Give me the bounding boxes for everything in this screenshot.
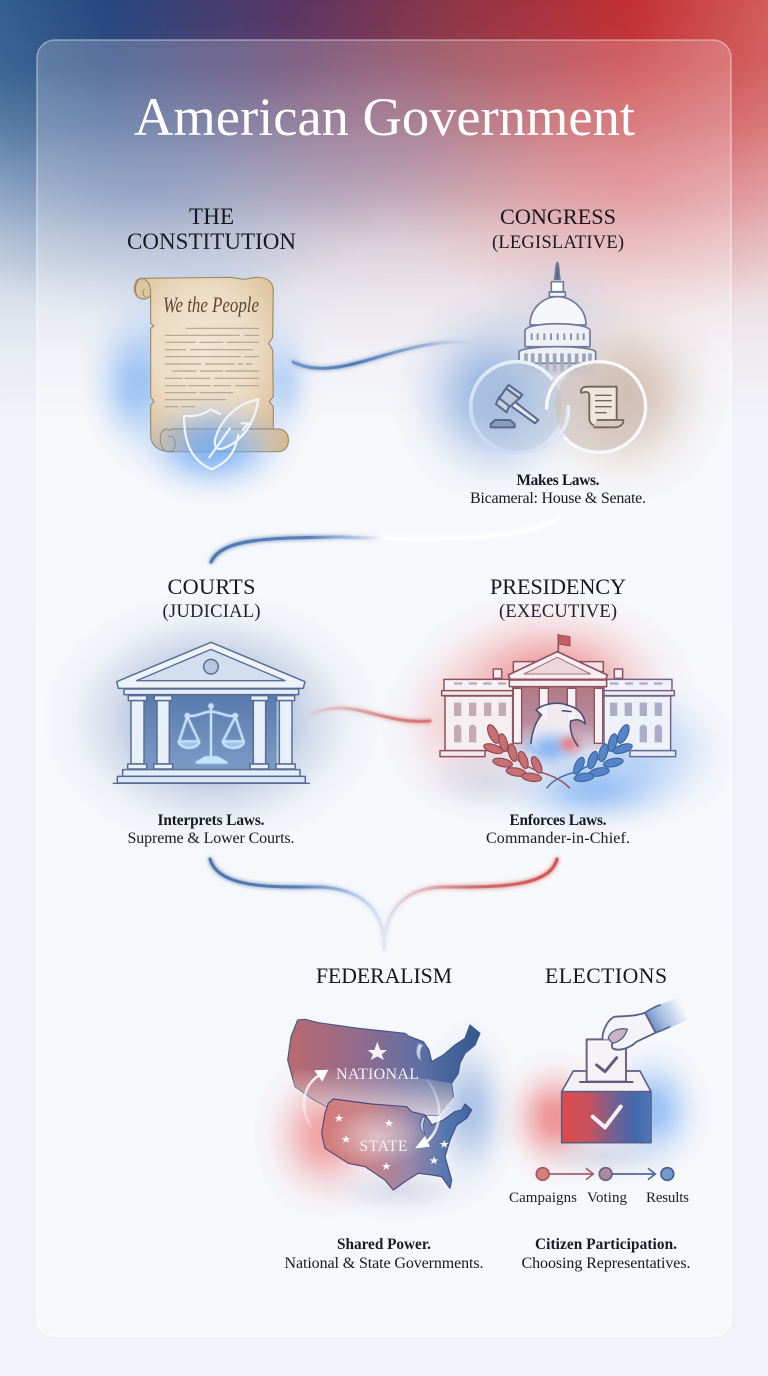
- flow: campaigns to voting to results: [536, 1168, 674, 1180]
- heading: presidency: PRESIDENCY: [490, 574, 626, 599]
- glow: courts: [42, 590, 382, 850]
- connector: courts to presidency: [310, 708, 430, 721]
- panel: federalism: [253, 964, 520, 1272]
- icon: small scroll: [581, 387, 623, 427]
- icon: gavel: [491, 385, 538, 427]
- caption: federalism: National & State Governments.: [284, 1255, 484, 1272]
- glow: congress: [390, 235, 730, 505]
- heading: courts: [162, 574, 260, 622]
- heading: courts: COURTS: [168, 574, 256, 599]
- icon: courthouse: [113, 642, 310, 783]
- icon: white house: [440, 634, 676, 757]
- panel: the constitution: [80, 204, 330, 505]
- caption: elections: Citizen Participation.: [535, 1236, 677, 1253]
- caption: elections: [522, 1236, 690, 1272]
- caption: presidency: [486, 812, 630, 847]
- flow labels: [509, 1190, 689, 1206]
- panel: presidency: [380, 574, 740, 847]
- caption: courts: [128, 812, 294, 847]
- panel: elections: [495, 964, 712, 1272]
- glow: elections: [495, 1038, 712, 1186]
- icon: scales of justice: [179, 704, 244, 763]
- icon: eagle and laurel wreath: [483, 703, 633, 788]
- caption: federalism: [284, 1236, 484, 1272]
- panel: congress: [390, 204, 730, 507]
- glow: shield base: [125, 389, 301, 505]
- heading: the constitution: THE: [189, 204, 234, 229]
- heading: courts: (JUDICIAL): [162, 602, 260, 622]
- glow: constitution: [80, 225, 330, 505]
- panel: courts: [42, 574, 382, 850]
- connector: federalism to elections: [475, 1090, 547, 1092]
- heading: congress: CONGRESS: [500, 204, 616, 229]
- icon: capitol dome: [519, 262, 596, 372]
- flow labels: Results: [646, 1190, 689, 1206]
- caption: elections: Choosing Representatives.: [522, 1255, 690, 1272]
- caption: courts: Interprets Laws.: [158, 812, 265, 829]
- caption: federalism: Shared Power.: [337, 1236, 431, 1253]
- icon: parchment scroll: [134, 277, 288, 452]
- icon: linked rings with gavel and scroll: [471, 362, 646, 452]
- icon: arrows between national and state: [304, 1074, 439, 1147]
- icon: stars: [334, 1042, 449, 1170]
- heading: elections: ELECTIONS: [545, 964, 667, 988]
- icon: national and state maps: [288, 1019, 480, 1190]
- icon: shield and quill: [184, 399, 258, 469]
- title: American Government: [134, 86, 635, 147]
- caption: congress: Makes Laws.: [516, 472, 600, 489]
- caption: presidency: Enforces Laws.: [510, 812, 607, 829]
- caption: courts: Supreme & Lower Courts.: [128, 830, 294, 847]
- label: national: NATIONAL: [336, 1066, 419, 1083]
- caption: congress: [470, 472, 646, 507]
- heading: congress: [492, 204, 624, 253]
- caption: congress: Bicameral: House & Senate.: [470, 490, 646, 507]
- connector: congress to courts: [211, 517, 558, 562]
- background: [0, 0, 768, 356]
- heading: presidency: (EXECUTIVE): [499, 602, 617, 622]
- heading: congress: (LEGISLATIVE): [492, 233, 624, 253]
- map: state: [322, 1099, 472, 1190]
- caption: presidency: Commander-in-Chief.: [486, 830, 630, 847]
- glow: federalism: [253, 1018, 520, 1220]
- heading: the constitution: CONSTITUTION: [127, 229, 296, 254]
- connector: constitution to congress: [293, 342, 470, 368]
- text: we the people: We the People: [163, 292, 259, 317]
- flow labels: Campaigns: [509, 1190, 577, 1206]
- label: state: STATE: [360, 1138, 408, 1155]
- map: national: [288, 1019, 480, 1115]
- icon: ballot box with hand: [562, 997, 687, 1143]
- heading: presidency: [490, 574, 626, 622]
- heading: the constitution: [127, 204, 296, 254]
- heading: federalism: FEDERALISM: [316, 964, 452, 988]
- flow labels: Voting: [587, 1190, 628, 1206]
- connector: courts and presidency converge: [210, 859, 557, 948]
- glow: presidency: [380, 590, 740, 838]
